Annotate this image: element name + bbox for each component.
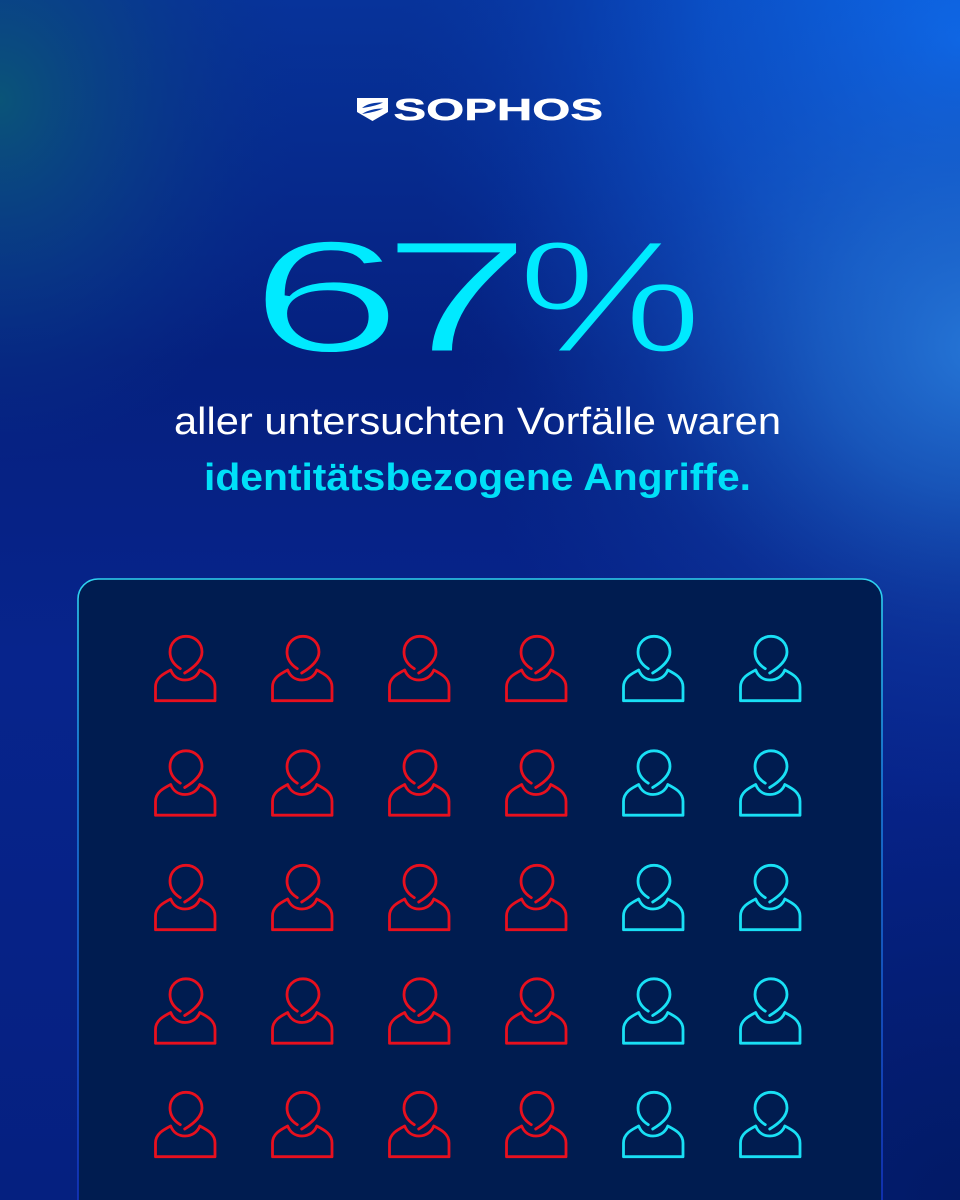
icon: person row 2 col 2 red xyxy=(272,751,332,815)
icon: shield xyxy=(357,98,388,121)
subtitle line 2: identitätsbezogene Angriffe. xyxy=(204,457,751,499)
icon: person row 1 col 1 red xyxy=(156,636,215,701)
icon: person row 4 col 6 cyan xyxy=(740,979,800,1043)
subtitle text xyxy=(174,401,781,499)
panel background xyxy=(78,579,882,1200)
icon: person row 2 col 6 cyan xyxy=(740,751,800,815)
headline statistic: 67% xyxy=(266,242,694,352)
icon: person row 2 col 3 red xyxy=(390,751,449,815)
icon: person row 5 col 2 red xyxy=(272,1092,332,1157)
icon: person row 4 col 2 red xyxy=(272,979,332,1043)
icon: person row 3 col 1 red xyxy=(156,865,215,930)
icon: person row 5 col 4 red xyxy=(506,1092,566,1157)
icon: person row 3 col 3 red xyxy=(390,865,449,930)
headline statistic: 67%: % xyxy=(518,208,702,386)
icon: person row 1 col 5 cyan xyxy=(624,636,683,701)
panel: people grid xyxy=(78,579,882,1200)
icon: person row 1 col 6 cyan xyxy=(740,636,800,701)
icon: person row 3 col 2 red xyxy=(272,865,332,930)
icon: person row 5 col 3 red xyxy=(390,1092,449,1157)
icon: person row 5 col 1 red xyxy=(156,1092,215,1157)
subtitle line 1: aller untersuchten Vorfälle waren xyxy=(174,401,781,443)
icon: person row 5 col 6 cyan xyxy=(740,1092,800,1157)
icon: person row 4 col 5 cyan xyxy=(624,979,683,1043)
icon: person row 1 col 4 red xyxy=(506,636,566,701)
icon: person row 1 col 2 red xyxy=(272,636,332,701)
icon: person row 4 col 1 red xyxy=(156,979,215,1043)
icon: person row 3 col 4 red xyxy=(506,865,566,930)
icon: person row 2 col 5 cyan xyxy=(624,751,683,815)
icon: person row 4 col 3 red xyxy=(390,979,449,1043)
icon: person row 2 col 4 red xyxy=(506,751,566,815)
icon: person row 3 col 6 cyan xyxy=(740,865,800,930)
icon: person row 1 col 3 red xyxy=(390,636,449,701)
headline statistic: 67%: 6 xyxy=(249,207,403,386)
headline statistic: 67%: 7 xyxy=(381,208,532,386)
icon: person row 5 col 5 cyan xyxy=(624,1092,683,1157)
icon: person row 4 col 4 red xyxy=(506,979,566,1043)
wordmark: SOPHOS xyxy=(394,92,603,127)
icon: person row 2 col 1 red xyxy=(156,751,215,815)
icon: person row 3 col 5 cyan xyxy=(624,865,683,930)
logo: Sophos xyxy=(357,92,603,127)
